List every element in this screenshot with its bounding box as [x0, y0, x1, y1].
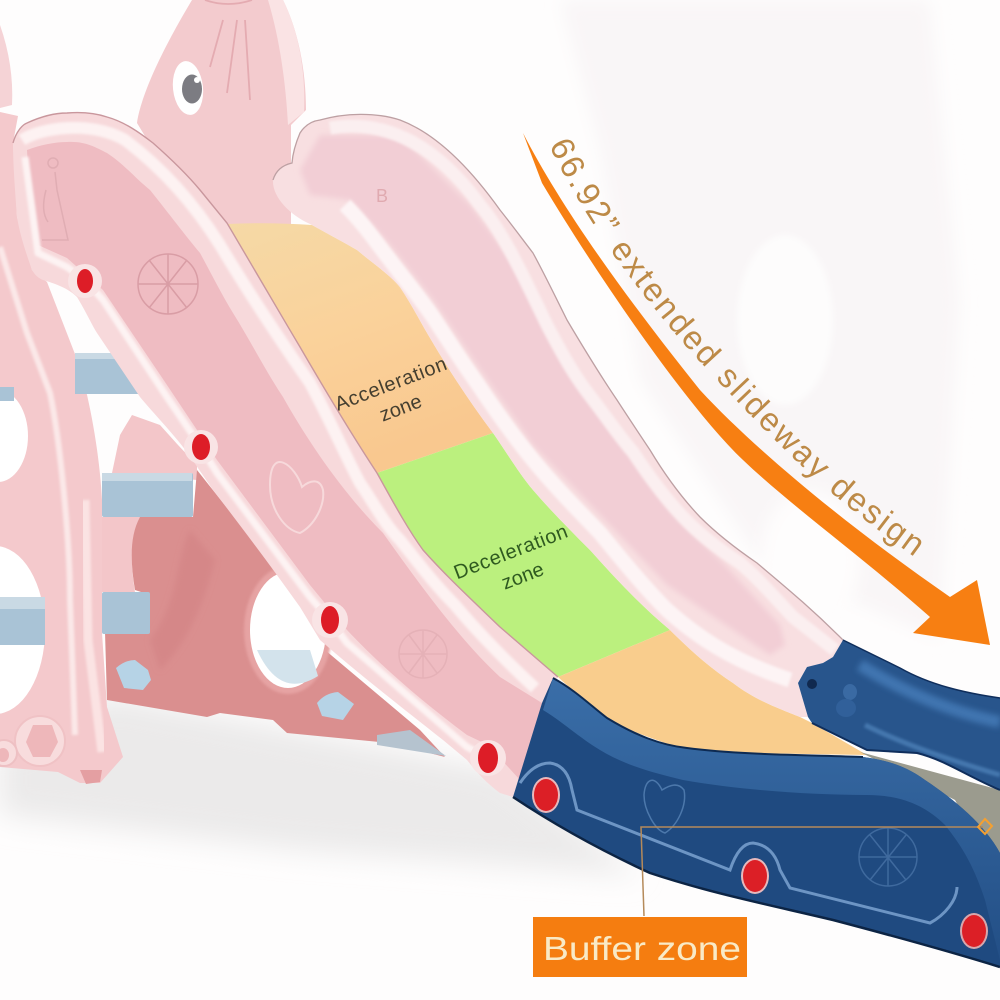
blue base outline: [513, 797, 1000, 967]
rabbit head panel: [137, 0, 306, 235]
rabbit eye: [170, 60, 206, 116]
rail inner highlight: [345, 205, 790, 680]
zone: deceleration surface: [377, 433, 670, 677]
rabbit ear at left edge: [0, 25, 12, 108]
leg bottom fitting: [0, 716, 102, 784]
blue embossed wheel: [859, 828, 917, 886]
rabbit whiskers: [205, 0, 252, 100]
blue top band: [543, 678, 1000, 960]
back slide rail: [273, 114, 843, 717]
rail outline: [273, 114, 843, 640]
blue embossed heart: [644, 780, 685, 833]
embossed wheel 1: [138, 254, 198, 314]
blue rivets: [532, 777, 988, 949]
support light lobes: [102, 415, 197, 592]
blue top outline: [553, 678, 863, 757]
embossed giraffe mark: [42, 158, 68, 240]
blue steps: [0, 353, 193, 645]
blue stripe: [520, 763, 957, 923]
leg holes: [0, 390, 28, 482]
zone: acceleration surface: [227, 223, 493, 473]
surface label: acceleration zone: zone: [377, 390, 425, 426]
embossed wheel 2: [399, 630, 447, 678]
zone: buffer surface: [558, 630, 867, 755]
support hole: [244, 566, 332, 694]
front slide rail: [13, 113, 558, 797]
callout box: buffer zone: Buffer zone: [543, 930, 741, 967]
slide surface: [227, 223, 867, 755]
knob left: [116, 660, 151, 690]
front rail blue buffer section: [513, 678, 1000, 967]
surface label: deceleration zone: Deceleration: [451, 521, 571, 584]
back rail blue end: [798, 640, 1000, 885]
rear support panel: [102, 415, 446, 757]
orange curved arrow: [523, 133, 990, 645]
rail inner panel: [27, 142, 542, 780]
rail channel: [300, 135, 785, 655]
rail outer highlight: [330, 126, 835, 650]
surface label: deceleration zone: zone: [499, 558, 547, 594]
curved label: slideway length: 66.92” extended slideway design: [552, 140, 922, 556]
support dark body: [105, 470, 445, 757]
rail rivets: [68, 264, 506, 776]
rail letter: B: [376, 186, 388, 206]
blue floor strip: [377, 730, 446, 756]
surface label: acceleration zone: Acceleration: [332, 353, 450, 416]
callout box: buffer zone: [533, 917, 747, 977]
knob right: [317, 692, 354, 720]
rail top highlight: [22, 128, 535, 688]
embossed heart: [270, 462, 323, 533]
joint hole and buttons: [807, 679, 857, 717]
rail top outline: [13, 113, 558, 677]
callout leader line: buffer zone: [641, 819, 992, 916]
left leg frame with holes: [0, 112, 123, 784]
rail lower stripe: [25, 157, 488, 758]
